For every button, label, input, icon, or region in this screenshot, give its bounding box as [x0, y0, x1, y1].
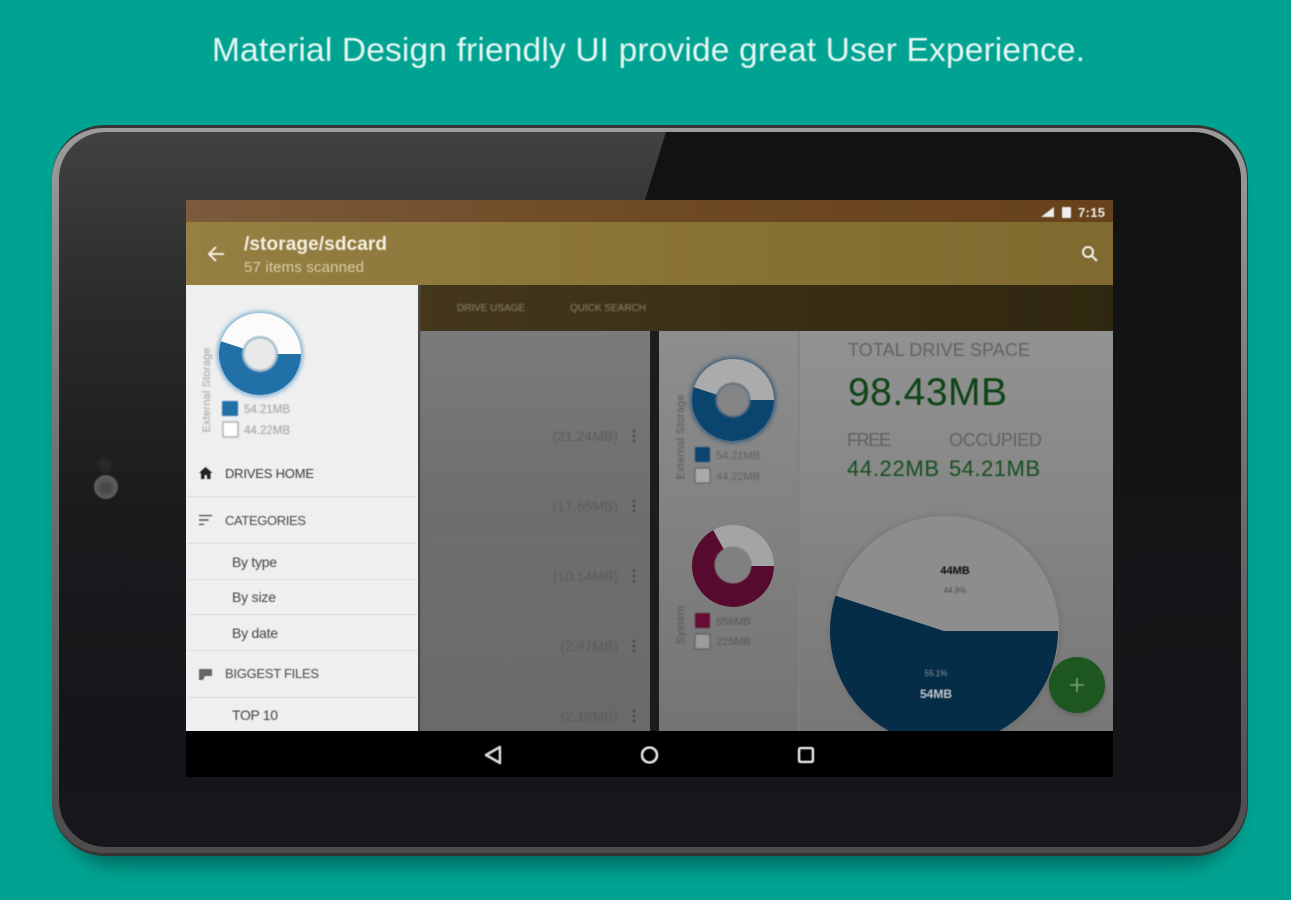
- tablet bezel frame: [52, 128, 1247, 853]
- menu: categories: CATEGORIES: [225, 513, 306, 528]
- legend: system: 656MB: [716, 616, 751, 628]
- pie chart: usage: 54MB: [920, 687, 952, 701]
- icon: search: [1083, 247, 1097, 261]
- file sizes: (10.14MB): [553, 568, 618, 584]
- legend: drawer: [222, 401, 290, 437]
- file sizes: [553, 428, 618, 724]
- donut: external storage: [690, 357, 776, 443]
- overflow menu dots: [633, 430, 635, 722]
- screen: [186, 200, 1113, 777]
- tab: quick search: QUICK SEARCH: [570, 303, 646, 314]
- android navigation bar: [186, 731, 1113, 777]
- icon: back arrow: [209, 247, 224, 261]
- donut: system: [692, 525, 774, 607]
- menu: top 10: TOP 10: [232, 707, 278, 723]
- title: Material Design friendly UI provide great User Experience.: [212, 32, 1085, 69]
- total drive space value: 98.43MB: [848, 371, 1007, 414]
- pie chart: usage: 44.9%: [944, 586, 966, 595]
- file sizes: (2.97MB): [560, 638, 618, 654]
- donut: drawer external storage: [217, 311, 303, 397]
- legend: drawer: 44.22MB: [244, 425, 290, 437]
- menu: by size: By size: [232, 589, 276, 605]
- status bar: [186, 200, 1113, 222]
- free value: 44.22MB: [847, 456, 939, 481]
- icon: nav back: [486, 747, 500, 763]
- scan count: 57 items scanned: [244, 259, 364, 276]
- total drive space label: TOTAL DRIVE SPACE: [848, 340, 1030, 360]
- legend: drawer: 54.21MB: [244, 404, 290, 416]
- menu: biggest files: BIGGEST FILES: [225, 666, 319, 681]
- menu: drives home: DRIVES HOME: [225, 466, 314, 481]
- path heading: /storage/sdcard: [244, 234, 387, 255]
- tablet body: [59, 132, 1241, 847]
- legend: system: [695, 613, 751, 649]
- tablet shadow: [62, 150, 1238, 866]
- file sizes: (17.65MB): [553, 498, 618, 514]
- file sizes: (2.18MB): [560, 708, 618, 724]
- icon: signal: [1041, 207, 1054, 217]
- legend: system: 225MB: [716, 636, 751, 648]
- icon: nav recents: [799, 748, 813, 762]
- tab: drive usage: DRIVE USAGE: [457, 303, 525, 314]
- front camera: [94, 458, 118, 499]
- legend: external storage: 54.21MB: [716, 450, 760, 462]
- icon: battery: [1062, 207, 1071, 218]
- pie chart: usage: [828, 514, 1062, 748]
- floating action button: [1049, 657, 1105, 715]
- panel: file list: [420, 331, 650, 731]
- panel divider: [650, 331, 659, 731]
- file sizes: (21.24MB): [553, 428, 618, 444]
- panel: drive details: [798, 331, 1113, 748]
- legend: external storage: 44.22MB: [716, 471, 760, 483]
- menu: by type: By type: [232, 554, 277, 570]
- occupied value: 54.21MB: [949, 456, 1040, 481]
- icon: nav home: [642, 748, 657, 762]
- free label: FREE: [847, 430, 891, 450]
- tablet outer edge: [52, 125, 1248, 856]
- pie label: occupied: 55.1%: [925, 669, 947, 678]
- tablet device: [52, 125, 1248, 866]
- pie label: free: 44MB: [940, 565, 970, 577]
- row separators: [187, 496, 417, 698]
- occupied label: OCCUPIED: [949, 430, 1042, 450]
- label: external storage: External Storage: [675, 394, 687, 480]
- tab bar: [420, 285, 1113, 331]
- panel: drive list: [659, 331, 799, 731]
- label: drawer external storage: External Storage: [201, 348, 213, 432]
- legend: external storage: [695, 447, 760, 483]
- navigation drawer: [186, 285, 420, 731]
- toolbar: [186, 222, 1113, 285]
- clock: 7:15: [1078, 205, 1105, 220]
- label: system: System: [675, 606, 687, 644]
- menu: by date: By date: [232, 625, 278, 641]
